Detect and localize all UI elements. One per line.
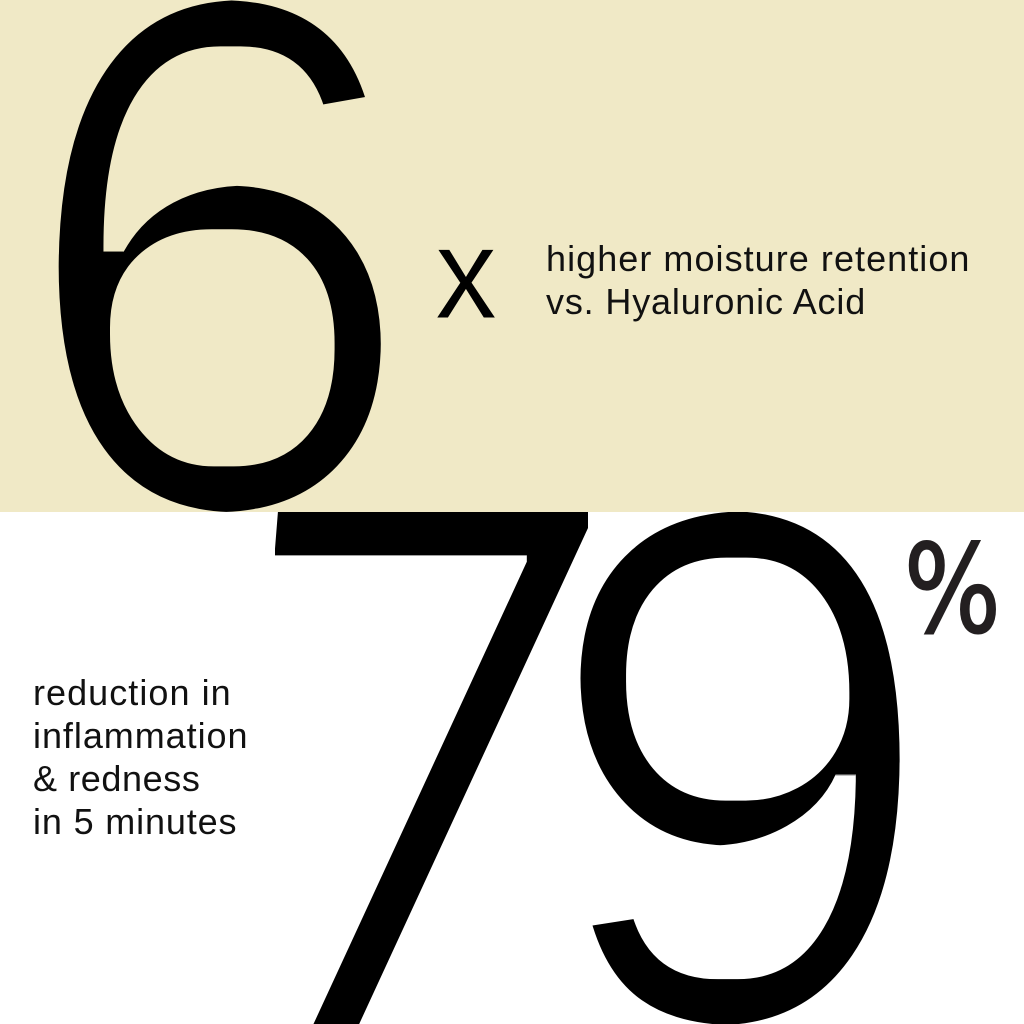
percent sign: % bbox=[904, 519, 1001, 661]
text block: reduction in inflammation: reduction in bbox=[33, 672, 232, 713]
text block: reduction in inflammation: in 5 minutes bbox=[33, 801, 237, 842]
multiplier: x: x bbox=[435, 200, 497, 346]
big number: 79 bbox=[275, 512, 900, 1024]
text block: reduction in inflammation bbox=[33, 672, 248, 842]
text block: reduction in inflammation: & redness bbox=[33, 758, 200, 799]
text block: higher moisture retention bbox=[546, 238, 970, 322]
text block: higher moisture retention: higher moisture retention bbox=[546, 238, 970, 279]
panel: beige top background bbox=[0, 0, 1024, 512]
text block: reduction in inflammation: inflammation bbox=[33, 715, 248, 756]
text block: higher moisture retention: vs. Hyaluronic Acid bbox=[546, 281, 866, 322]
panel: white bottom background bbox=[0, 512, 1024, 1024]
